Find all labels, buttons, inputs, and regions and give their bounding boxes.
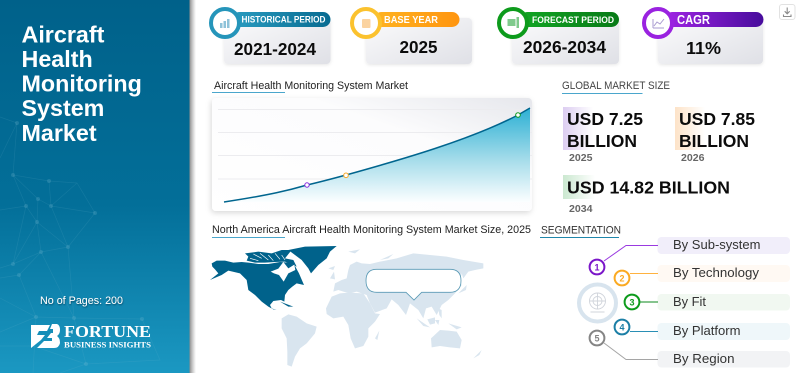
panel: CAGR: 11% xyxy=(686,38,721,58)
stat: USD 7.85 billion: USD 7.85 xyxy=(679,109,755,129)
panel: base year: 2025 xyxy=(400,37,438,57)
area chart xyxy=(212,98,532,211)
panel: base year: BASE YEAR xyxy=(384,15,439,26)
stat: USD 7.25 billion: BILLION xyxy=(567,131,637,151)
icon: forecast screen xyxy=(508,17,519,28)
icon: growth chart xyxy=(653,19,664,28)
stat: USD 7.85 billion xyxy=(675,107,755,164)
segment: By Technology: 2 xyxy=(619,273,625,283)
stat: USD 7.25 billion: USD 7.25 xyxy=(567,109,643,129)
segment: By Technology: By Technology xyxy=(673,266,760,280)
stat: USD 7.85 billion: BILLION xyxy=(679,131,749,151)
diagram: segmentation hub xyxy=(579,284,616,322)
icon: calendar xyxy=(362,19,370,28)
panel: forecast period xyxy=(499,9,619,64)
panel: historical period xyxy=(211,9,330,64)
panel: base year xyxy=(352,9,472,64)
data point: 2034 xyxy=(516,113,520,117)
segment: By Sub-system: By Sub-system xyxy=(673,238,760,252)
icon: download xyxy=(780,4,795,20)
segment: By Region: By Region xyxy=(673,352,735,366)
title: Health xyxy=(22,46,93,72)
title: Aircraft xyxy=(22,22,105,48)
heading: global market size: GLOBAL MARKET SIZE xyxy=(562,80,670,92)
icon: bars xyxy=(220,19,230,28)
callout xyxy=(366,269,461,300)
logo xyxy=(31,322,151,350)
segment: By Region xyxy=(590,331,790,368)
data point: 2025 xyxy=(305,183,309,187)
segment: By Fit: 3 xyxy=(629,297,635,307)
logo: FORTUNE xyxy=(64,322,151,341)
segment: By Platform: 4 xyxy=(619,322,625,332)
logo: BUSINESS INSIGHTS xyxy=(64,340,151,350)
heading: market chart: Aircraft Health Monitoring System Market xyxy=(214,80,408,92)
heading: north america: North America Aircraft Health Monitoring System Market Size, 2025 xyxy=(212,224,531,236)
region: North America xyxy=(210,246,337,310)
panel: historical period: 2021-2024 xyxy=(234,39,316,59)
panel: CAGR: CAGR xyxy=(677,13,710,27)
icon: radar xyxy=(590,293,606,312)
world map xyxy=(210,246,483,367)
segment: By Sub-system xyxy=(590,237,790,274)
stat: USD 14.82 billion xyxy=(563,175,730,215)
segment: By Region: 5 xyxy=(594,333,600,343)
title: System xyxy=(22,95,104,121)
segment: By Fit: By Fit xyxy=(673,295,707,309)
segment: By Technology xyxy=(615,265,790,285)
segment: By Platform xyxy=(615,320,790,340)
title xyxy=(22,22,142,146)
panel: forecast period: 2026-2034 xyxy=(523,37,606,57)
data point: 2026 xyxy=(344,173,348,178)
segment: By Platform: By Platform xyxy=(673,324,740,338)
panel: forecast period: FORECAST PERIOD xyxy=(532,15,614,26)
title: Market xyxy=(22,120,97,146)
stat: USD 7.25 billion: 2025 xyxy=(569,153,593,164)
stat: USD 7.85 billion: 2026 xyxy=(681,153,705,164)
stat: USD 7.25 billion xyxy=(563,107,643,164)
panel: sidebar xyxy=(0,0,196,373)
stat: USD 14.82 billion: USD 14.82 BILLION xyxy=(567,178,730,198)
segment: By Fit xyxy=(625,294,790,310)
panel: CAGR xyxy=(644,9,764,64)
network pattern xyxy=(0,117,160,373)
title: Monitoring xyxy=(22,70,142,96)
panel: historical period: HISTORICAL PERIOD xyxy=(242,15,326,26)
segment: By Sub-system: 1 xyxy=(594,262,600,272)
stat: USD 14.82 billion: 2034 xyxy=(569,204,593,215)
heading: segmentation: SEGMENTATION xyxy=(541,224,621,236)
pages count: No of Pages: 200 xyxy=(40,295,123,307)
